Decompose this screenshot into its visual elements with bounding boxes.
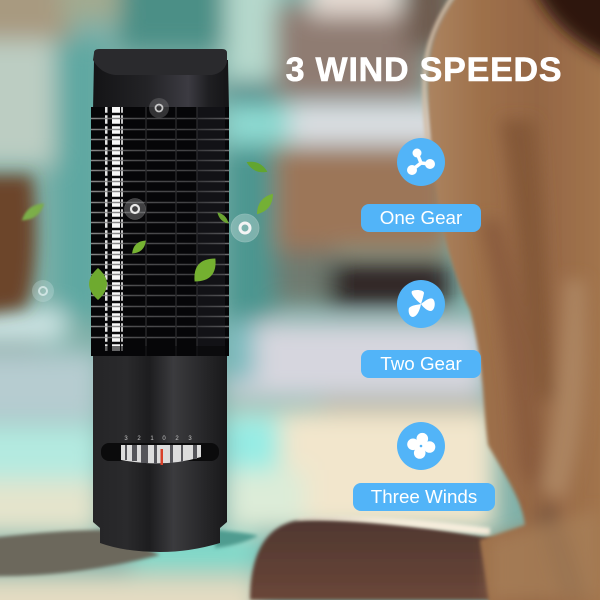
speed dial: 0 (162, 436, 166, 442)
icon: one gear fan (397, 138, 445, 186)
speed dial: 2 (137, 436, 141, 442)
fan grille (91, 107, 229, 356)
title: 3 WIND SPEEDS (286, 51, 562, 89)
bubbles (32, 98, 259, 302)
floor shadow (0, 530, 258, 576)
speed dial: 1 (150, 436, 154, 442)
label: one gear: One Gear (380, 207, 462, 228)
label: three winds: Three Winds (371, 486, 477, 507)
label: one gear (361, 204, 481, 232)
icon: two gear fan (397, 280, 445, 328)
fan base (93, 356, 227, 552)
woman: sweater and arms (250, 0, 600, 600)
label: two gear (361, 350, 481, 378)
speed dial: 3 (124, 436, 128, 442)
icon: three winds fan (397, 422, 445, 470)
fan top body (93, 60, 229, 110)
speed dial: 2 (175, 436, 179, 442)
leaves (19, 159, 277, 300)
label: two gear: Two Gear (380, 353, 462, 374)
label: three winds (353, 483, 495, 511)
fan top cap (93, 49, 227, 75)
speed dial (101, 436, 219, 465)
speed dial: 3 (188, 436, 192, 442)
